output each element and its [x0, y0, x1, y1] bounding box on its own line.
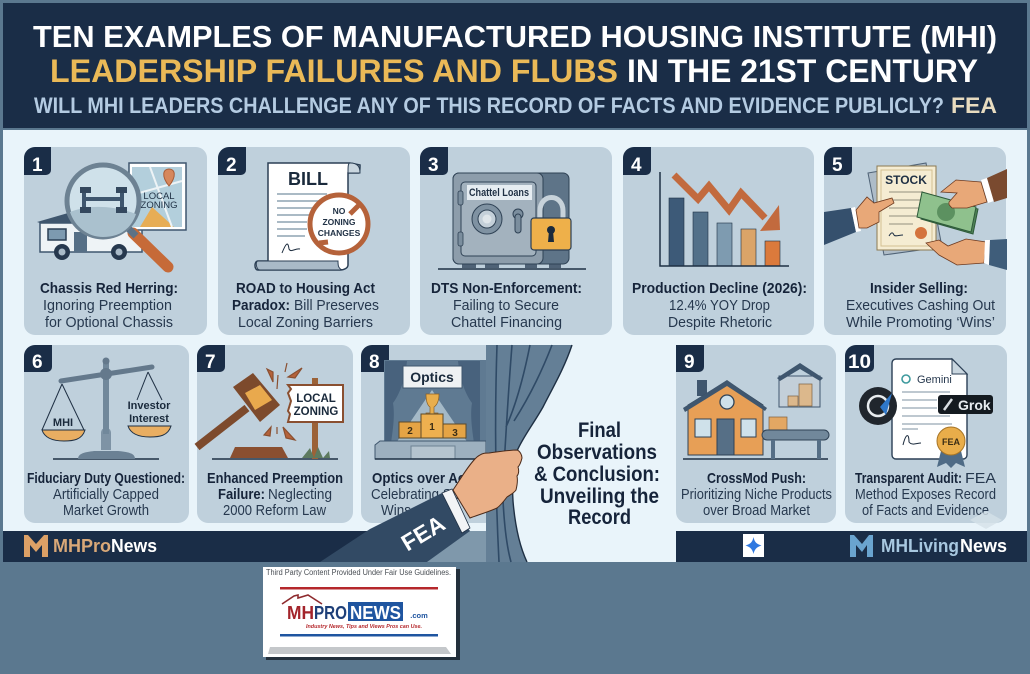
caption 5: While Promoting ‘Wins’ [846, 314, 995, 331]
subtitle: FEA [951, 93, 997, 118]
panel 9: CrossMod push [676, 345, 836, 523]
icon: conveyor with box [762, 417, 829, 459]
MHProNews logo wordmark: PRO [314, 603, 347, 623]
logo text: MHLivingNews [881, 536, 1007, 556]
footer bar right: MHLivingNews [676, 531, 1027, 562]
title line 2 [50, 53, 978, 89]
MHProNews logo wordmark: NEWS [350, 603, 401, 623]
shirt cuff [442, 489, 470, 533]
logo text: MHProNews [53, 536, 157, 556]
caption 5 [846, 280, 996, 331]
number badge 6: 6 [32, 352, 43, 373]
panel 2: ROAD to Housing Act [218, 147, 410, 335]
caption 8: Optics over Action: [372, 470, 494, 487]
icon: stock certificate: STOCK [885, 173, 927, 187]
caption 10: Method Exposes Record [855, 486, 996, 503]
number badge 6 [24, 345, 52, 373]
caption 4: 12.4% YOY Drop [669, 297, 770, 314]
logo text: MHLivingNews: News [960, 536, 1007, 556]
panel 6: fiduciary duty [24, 345, 189, 523]
number badge 7: 7 [205, 352, 216, 373]
caption 1: for Optional Chassis [45, 314, 173, 331]
final observations heading [534, 419, 660, 529]
panel 10: transparent audit [845, 345, 1007, 529]
fair use notice: Third Party Content Provided Under Fair Use Guidelines. [266, 568, 451, 577]
caption 1: Ignoring Preemption [43, 297, 172, 314]
final observations heading: Observations [537, 441, 657, 464]
icon: Grok label: Grok [958, 397, 991, 413]
footer bar left: MHProNews [3, 531, 486, 562]
badge shadow strip [268, 647, 451, 654]
icon: balance scale: Interest [129, 413, 169, 425]
final observations heading: Unveiling the [540, 485, 659, 508]
blue rule [280, 634, 438, 636]
MHProNews logo wordmark: MH [287, 603, 314, 623]
caption 8: Celebrating Small [371, 486, 476, 503]
icon: manufactured home on chassis [37, 211, 142, 260]
icon: warehouse [777, 363, 823, 407]
icon: no zoning changes prohibition: NO [333, 206, 346, 216]
number badge 7 [197, 345, 225, 373]
header band [3, 3, 1027, 128]
caption 5: Executives Cashing Out [846, 297, 996, 314]
icon: balance scale: Investor [128, 400, 171, 412]
number badge 8: 8 [369, 352, 380, 373]
icon: locked safe [438, 173, 586, 269]
icon: gavel striking sign: LOCAL [296, 393, 336, 405]
caption 6: Market Growth [63, 502, 149, 519]
light content background [3, 130, 1027, 562]
caption 4: Despite Rhetoric [668, 314, 772, 331]
caption 6 [27, 470, 185, 519]
sparkle icon box [743, 534, 764, 557]
icon: gavel striking sign [197, 363, 343, 459]
caption 7: Failure: [218, 486, 265, 503]
panel 3: DTS non-enforcement [420, 147, 612, 335]
logo text: MHProNews: MHPro [53, 536, 111, 556]
caption 10 [855, 470, 996, 519]
number badge 5 [824, 147, 852, 176]
MHProNews logo wordmark: .com [410, 611, 428, 620]
caption 3: DTS Non-Enforcement: [431, 280, 582, 297]
number badge 9 [676, 345, 704, 373]
icon: stage with trophy podium: 1 [429, 422, 435, 433]
icon: no zoning changes prohibition [310, 195, 368, 253]
fair use badge [263, 567, 460, 660]
icon: balance scale: MHI [53, 417, 73, 429]
caption 10: of Facts and Evidence [862, 502, 989, 519]
number badge 1: 1 [32, 155, 43, 176]
icon: bill document: BILL [288, 169, 328, 189]
caption 2: Local Zoning Barriers [238, 314, 373, 331]
icon: orange house [683, 380, 828, 459]
panel 4: production decline [623, 147, 814, 335]
caption 7: Enhanced Preemption [207, 470, 343, 487]
caption 5: Insider Selling: [870, 280, 968, 297]
caption 3: Chattel Financing [451, 314, 562, 331]
panel 1: chassis red herring [24, 147, 207, 335]
icon: stage with trophy podium: Optics [410, 369, 454, 385]
number badge 4 [623, 147, 651, 176]
caption 3 [431, 280, 582, 331]
icon: local zoning map [129, 163, 186, 230]
icon: FEA seal [937, 427, 965, 468]
icon: stock certificate [868, 163, 942, 255]
caption 9: CrossMod Push: [707, 470, 806, 487]
caption 3: Failing to Secure [453, 297, 559, 314]
roof mark [282, 595, 322, 604]
icon: magnifying glass over chassis [67, 165, 168, 267]
icon: stage with trophy podium: 2 [407, 426, 413, 437]
number badge 9: 9 [684, 352, 695, 373]
number badge 2 [218, 147, 246, 176]
sleeve [320, 493, 470, 562]
tagline: Industry News, Tips and Views Pros can Use. [306, 624, 422, 630]
logo: MHLivingNews M [850, 535, 873, 557]
icon: balance scale [42, 358, 171, 459]
icon: top right hand and brown sleeve [941, 169, 1007, 208]
chart: declining production bars [660, 172, 789, 266]
icon: downward zigzag arrow [674, 175, 780, 231]
caption 9: Prioritizing Niche Products [681, 486, 832, 503]
number badge 5: 5 [832, 155, 843, 176]
caption 7: Neglecting [268, 486, 332, 503]
title line 2: LEADERSHIP FAILURES AND FLUBS [50, 53, 618, 89]
red rule [280, 587, 438, 590]
final observations heading: Record [568, 506, 631, 529]
caption 7 [207, 470, 343, 519]
caption 10: Transparent Audit: [855, 470, 962, 487]
caption 2: Bill Preserves [294, 297, 379, 314]
icon: Grok label [938, 395, 993, 414]
logo text: MHLivingNews: MHLiving [881, 536, 959, 556]
hand [453, 450, 522, 518]
logo text: MHProNews: News [111, 536, 157, 556]
icon: local zoning map: ZONING [141, 200, 177, 211]
caption 4 [632, 280, 807, 331]
panel 8: optics over action [361, 345, 496, 523]
number badge 3: 3 [428, 155, 439, 176]
final observations heading: & Conclusion: [534, 463, 660, 486]
icon: local zoning map: LOCAL [143, 191, 175, 202]
caption 8 [371, 470, 494, 519]
MHProNews logo wordmark [287, 602, 428, 623]
caption 9 [681, 470, 832, 519]
caption 6: Artificially Capped [53, 486, 159, 503]
logo: MHProNews M [24, 535, 48, 557]
caption 1: Chassis Red Herring: [40, 280, 178, 297]
icon: no zoning changes prohibition: ZONING [322, 217, 356, 227]
icon: left hand and sleeve [824, 197, 894, 245]
title line 1: TEN EXAMPLES OF MANUFACTURED HOUSING INSTITUTE (MHI) [33, 19, 997, 54]
number badge 4: 4 [631, 155, 642, 176]
icon: bill document [255, 163, 360, 270]
icon: FEA seal: FEA [942, 437, 961, 447]
subtitle: WILL MHI LEADERS CHALLENGE ANY OF THIS RECORD OF FACTS AND EVIDENCE PUBLICLY? [34, 93, 944, 118]
icon: black circular AI logo [859, 387, 897, 425]
icon: gavel striking sign: ZONING [294, 406, 338, 418]
number badge 8 [361, 345, 389, 373]
caption 1 [40, 280, 178, 331]
faint watermark diamond [970, 511, 1002, 529]
icon: locked safe: Chattel Loans [469, 187, 529, 199]
icon: stage with trophy podium [375, 360, 486, 459]
icon: audit document [892, 359, 967, 459]
sleeve label FEA: FEA [397, 510, 449, 556]
caption 8: Wins [381, 502, 411, 519]
number badge 10: 10 [848, 352, 871, 373]
caption 7: 2000 Reform Law [223, 502, 326, 519]
curtain [486, 345, 572, 562]
title line 2: IN THE 21ST CENTURY [627, 53, 978, 89]
icon: audit document: Gemini [917, 374, 952, 386]
number badge 3 [420, 147, 448, 176]
icon: no zoning changes prohibition: CHANGES [318, 228, 361, 238]
caption 2: ROAD to Housing Act [236, 280, 375, 297]
icon: bottom right hand and blue sleeve [926, 239, 1007, 270]
caption 2: Paradox: [232, 297, 290, 314]
panel 7: enhanced preemption [197, 345, 353, 523]
FEA sleeve and hand pulling curtain [320, 450, 522, 562]
number badge 10 [845, 345, 874, 373]
icon: stage with trophy podium: 3 [452, 428, 458, 439]
caption 6: Fiduciary Duty Questioned: [27, 470, 185, 487]
caption 4: Production Decline (2026): [632, 280, 807, 297]
number badge 1 [24, 147, 51, 176]
number badge 2: 2 [226, 155, 237, 176]
caption 10: FEA [965, 470, 996, 487]
icon: cash [917, 192, 978, 234]
panel 5: insider selling [824, 147, 1007, 335]
caption 2 [232, 280, 379, 331]
final observations heading: Final [578, 419, 621, 442]
caption 9: over Broad Market [703, 502, 811, 519]
